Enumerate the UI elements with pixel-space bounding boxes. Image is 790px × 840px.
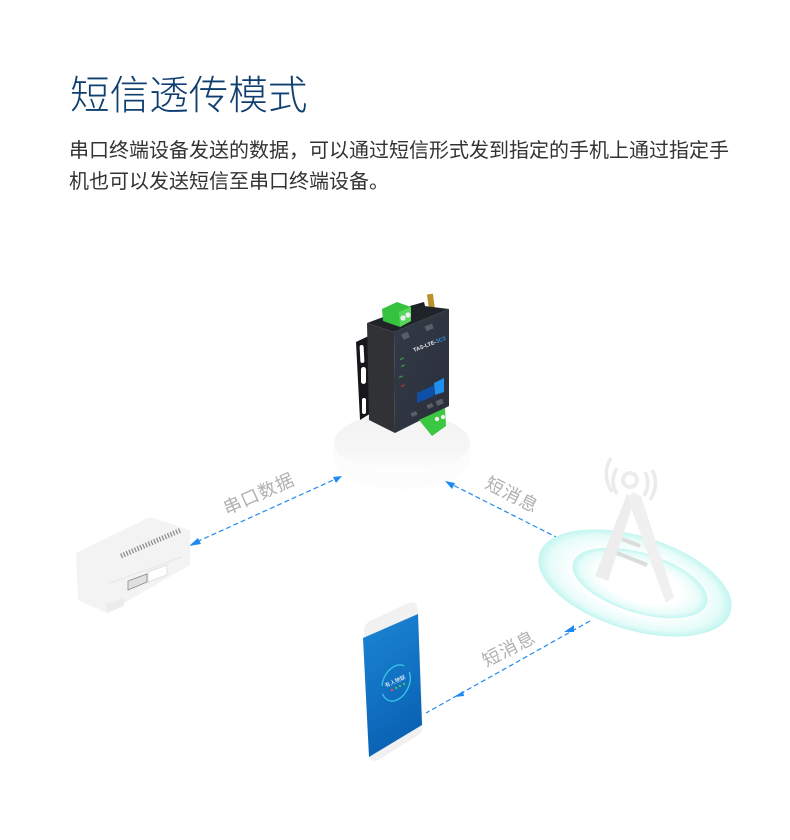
bottom green terminal xyxy=(419,408,446,436)
outer ring xyxy=(526,509,744,657)
platform disc xyxy=(333,413,470,489)
device top face xyxy=(367,305,449,332)
device label: TAS-LTE-3C3 xyxy=(413,336,447,354)
arrow: device to tower xyxy=(445,481,564,541)
antenna xyxy=(410,294,435,319)
device side face xyxy=(367,323,395,433)
box connector xyxy=(128,574,147,590)
device blue badge xyxy=(417,378,444,403)
box divider xyxy=(110,557,182,583)
description text xyxy=(69,140,729,193)
app logo dots xyxy=(391,683,405,691)
device status lights xyxy=(399,357,405,387)
inner ring xyxy=(564,534,716,632)
box body xyxy=(76,517,190,613)
device front face xyxy=(394,309,449,433)
serial terminal box xyxy=(76,517,190,613)
label: short message lower: 短消息 xyxy=(479,627,539,671)
phone body xyxy=(364,602,423,761)
app logo ring xyxy=(376,660,416,706)
app logo name: 有人物联 xyxy=(384,673,407,689)
description text: 机也可以发送短信至串口终端设备。 xyxy=(69,171,389,193)
box switch panel xyxy=(148,565,167,582)
label: serial data: 串口数据 xyxy=(220,469,298,519)
arrow: device to serial terminal xyxy=(189,476,342,546)
box corner panel xyxy=(106,598,124,613)
top green terminal xyxy=(382,302,411,327)
serial router device xyxy=(356,294,449,436)
phone screen xyxy=(363,614,422,757)
box vents xyxy=(121,530,181,556)
label: short message upper: 短消息 xyxy=(482,473,542,517)
arrow: tower to phone xyxy=(426,621,590,713)
description text: 串口终端设备发送的数据，可以通过短信形式发到指定的手机上通过指定手 xyxy=(69,140,729,162)
tower xyxy=(595,458,674,603)
device ports xyxy=(401,324,444,417)
phone xyxy=(363,602,423,761)
mounting bracket xyxy=(356,333,376,420)
title: 短信透传模式 xyxy=(70,74,307,118)
signal tower with rings xyxy=(526,458,744,657)
